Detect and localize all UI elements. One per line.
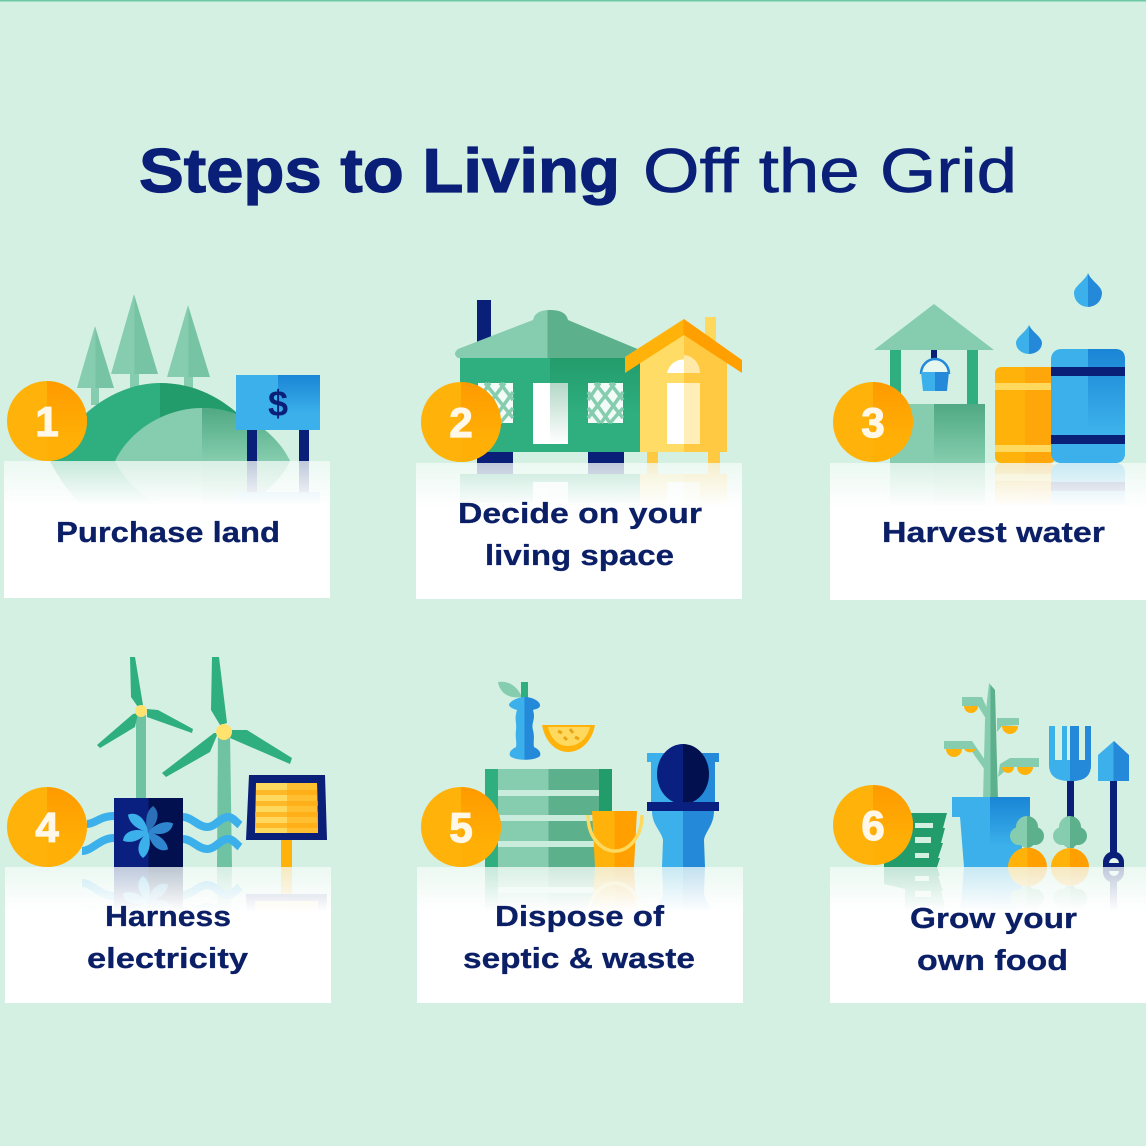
number badge 1: 1	[35, 398, 59, 445]
label: harness electricity: electricity	[87, 943, 248, 975]
panel: step 5 septic and waste	[417, 682, 743, 1003]
label: purchase land: Purchase land	[56, 517, 280, 549]
label: grow your own food	[910, 903, 1077, 977]
label: grow your own food: Grow your	[910, 903, 1077, 935]
panel: step 4 harness electricity	[5, 657, 331, 1003]
label: dispose of septic and waste	[463, 901, 695, 975]
panel: step 6 grow your own food	[830, 683, 1146, 1003]
number badge 3: 3	[861, 399, 885, 446]
illustration: well, barrels and water drops	[874, 273, 1125, 463]
label: dispose of septic and waste: Dispose of	[495, 901, 664, 933]
number badge 5	[421, 787, 501, 867]
label: decide on your living space	[458, 498, 702, 572]
illustration: compost crate, apple core, orange slice, bucket and toilet	[485, 682, 719, 867]
label: grow your own food: own food	[917, 945, 1068, 977]
label: harness electricity	[87, 901, 248, 975]
label: harness electricity: Harness	[105, 901, 231, 933]
number badge 2	[421, 382, 501, 462]
number badge 1	[7, 381, 87, 461]
illustration: green cabin and yellow tiny house	[455, 300, 742, 463]
number badge 5: 5	[449, 804, 473, 851]
label: harvest water: Harvest water	[882, 517, 1105, 549]
number badge 3	[833, 382, 913, 462]
label: dispose of septic and waste: septic & waste	[463, 943, 695, 975]
illustration: wind turbines, water turbine and solar panel	[82, 657, 327, 867]
title: Steps to Living	[139, 137, 620, 206]
label: decide on your living space: Decide on your	[458, 498, 702, 530]
illustration: hills, trees and land sale sign	[50, 294, 320, 461]
title	[139, 137, 1017, 206]
label: decide on your living space: living space	[485, 540, 674, 572]
illustration: hills, trees and land sale sign: $	[268, 383, 288, 424]
panel: step 1 purchase land	[4, 294, 330, 628]
number badge 6: 6	[861, 802, 885, 849]
number badge 6	[833, 785, 913, 865]
title: Off the Grid	[643, 137, 1017, 206]
number badge 4	[7, 787, 87, 867]
illustration: plant pot, garden tools, carrots and seed tray	[884, 683, 1129, 867]
panel: step 3 harvest water	[830, 273, 1146, 600]
number badge 2: 2	[449, 399, 473, 446]
panel: step 2 living space	[416, 300, 742, 626]
number badge 4: 4	[35, 804, 59, 851]
